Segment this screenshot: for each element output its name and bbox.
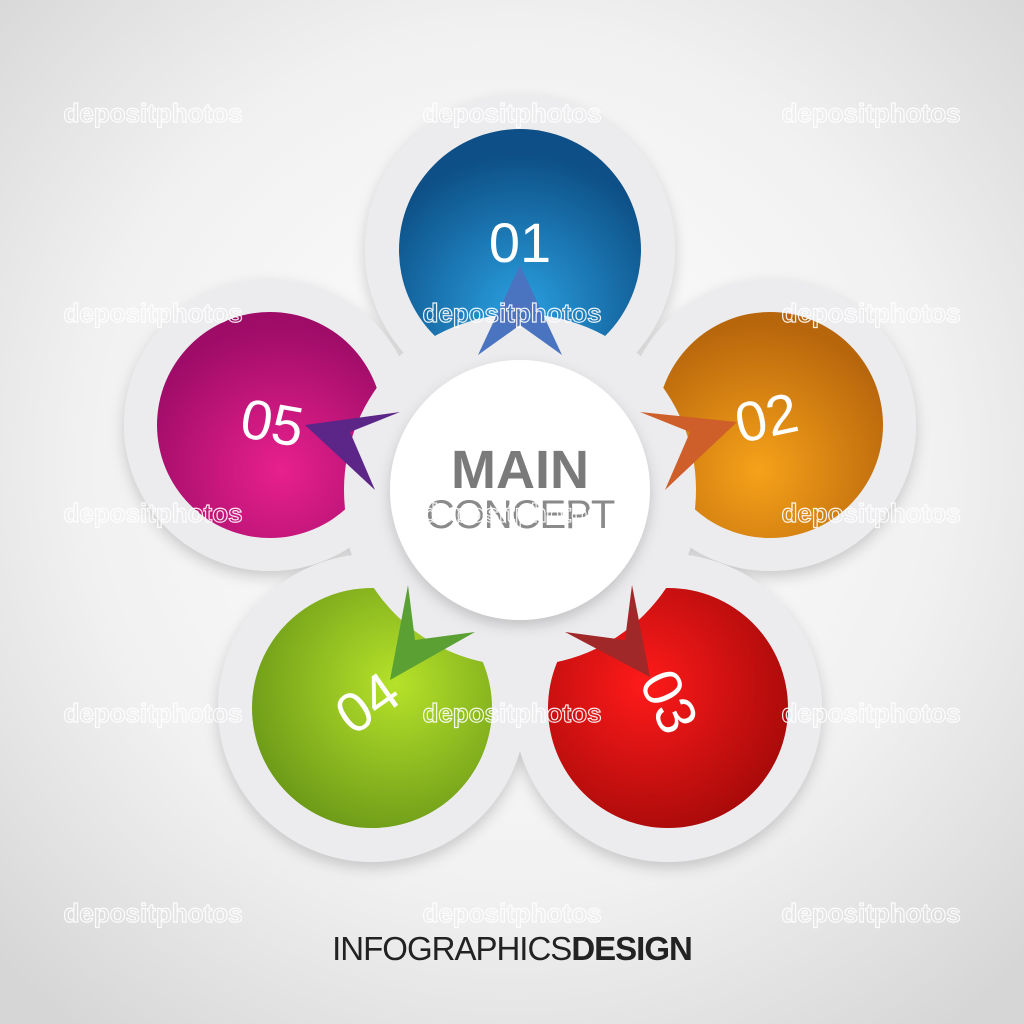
watermarks: depositphotos [781,98,961,128]
watermarks: depositphotos [781,298,961,328]
center ring [344,314,696,666]
circle 01 [399,129,641,371]
circle 01: 01 [489,211,551,274]
arrow 05 [305,412,400,490]
circle 04: 04 [324,659,411,746]
circle 05: 05 [236,386,308,459]
arrow 01 [478,265,562,355]
circle 03 [548,588,788,828]
watermarks: depositphotos [781,698,961,728]
footer title: INFOGRAPHICSDESIGN [332,930,692,967]
watermarks: depositphotos [781,498,961,528]
watermarks: depositphotos [422,98,602,128]
circle 02: 02 [729,380,803,455]
watermarks: depositphotos [63,298,243,328]
circle 04 [252,588,492,828]
watermarks: depositphotos [422,698,602,728]
main concept circle [390,360,650,620]
watermarks: depositphotos [63,698,243,728]
watermarks: depositphotos [422,498,602,528]
main concept circle: CONCEPT [426,493,615,537]
arrow 02 [640,412,737,490]
watermarks [63,98,961,928]
arrow 04 [390,585,475,680]
watermarks: depositphotos [781,898,961,928]
arrow 03 [565,585,650,677]
watermarks: depositphotos [63,898,243,928]
main concept circle: MAIN [451,440,589,500]
circle 02 [657,312,883,538]
circle 05 [157,312,383,538]
flower backing [124,95,916,862]
watermarks: depositphotos [422,298,602,328]
watermarks: depositphotos [422,898,602,928]
watermarks: depositphotos [63,98,243,128]
watermarks: depositphotos [63,498,243,528]
circle 03: 03 [628,660,711,743]
